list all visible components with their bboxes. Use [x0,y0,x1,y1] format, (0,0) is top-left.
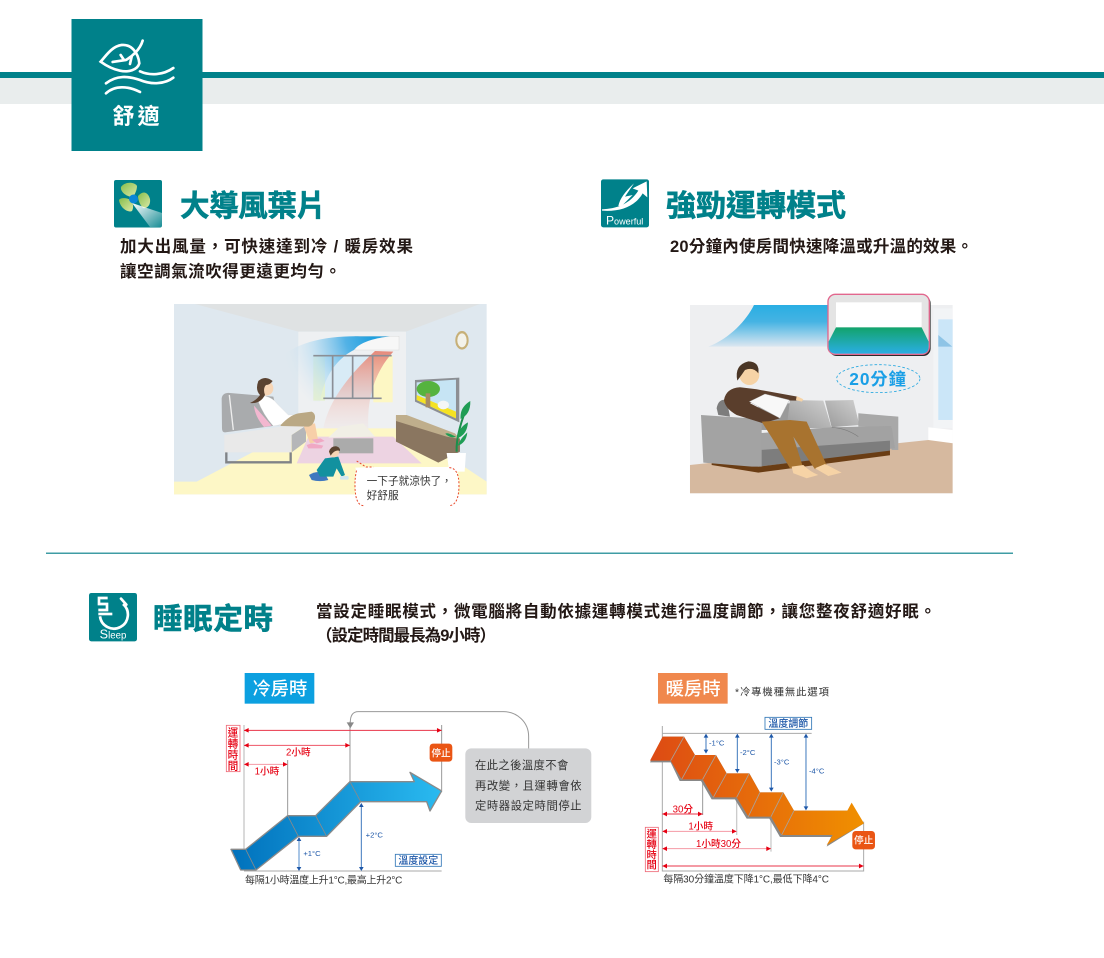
header band [0,72,1104,104]
AC close-up [828,294,931,356]
rug [297,437,422,463]
warm airflow [323,351,393,428]
icon: powerful: Powerful [606,213,643,227]
operating time label [645,827,658,872]
caption: 每隔30分鐘溫度下降1°C,最低下降4°C [663,872,829,885]
temperature drop markers: -2°C [740,748,756,757]
time arrows: 1小時 [688,821,713,832]
time arrows [662,804,864,868]
chart: cooling [226,673,591,886]
temperature drop markers: -4°C [809,767,825,776]
panel: powerful mode [601,179,973,493]
callout: 一下子就涼快了， [367,474,452,487]
time arrows: 1小時 [255,766,280,777]
axes [662,726,864,871]
illustration: man on sofa [690,294,953,493]
panel: sleep timer [89,593,936,886]
operating time label: 時 [228,749,239,761]
note box: 再改變，且運轉會依 [475,779,582,793]
operating time label: 運 [228,727,239,740]
caption: 每隔1小時溫度上升1°C,最高上升2°C [245,873,402,886]
description: 20分鐘內使房間快速降溫或升溫的效果。 [670,236,973,256]
callout [355,461,459,506]
icon: leaf on breeze [101,41,173,93]
description [120,236,414,281]
icon: powerful [601,179,649,227]
temperature adjust tag: 溫度調節 [768,717,808,730]
sofa [701,400,898,473]
20 minutes label: 20分鐘 [849,369,906,389]
temperature drop markers: -3°C [774,758,790,767]
heading: 睡眠定時 [153,603,273,636]
heading: 大導風葉片 [180,190,326,223]
child [309,446,349,481]
television [415,378,459,422]
temperature drop markers [704,734,825,810]
temperature drop markers: -1°C [709,739,725,748]
section divider [46,552,1013,554]
axes [244,722,442,871]
heating title: 暖房時 [666,678,721,699]
badge label: 舒適 [112,104,163,129]
sofa [222,393,306,462]
chart: heating [645,673,875,885]
operating time label: 轉 [228,737,239,750]
illustration: living room [174,304,487,506]
icon: sleep [89,593,137,641]
coffee table [328,423,375,453]
note box: 在此之後溫度不會 [475,758,568,772]
temperature arrow [231,772,442,870]
panel: large louver [114,180,487,506]
temperature rise markers: +1°C [303,849,321,858]
heading: 強勁運轉模式 [666,190,846,223]
return arrow [347,712,529,750]
cool airflow [275,336,390,402]
description: 當設定睡眠模式，微電腦將自動依據運轉模式進行溫度調節，讓您整夜舒適好眠。 [316,601,936,621]
clock [455,331,469,350]
woman [250,378,325,448]
stop tag: 停止 [431,747,451,759]
time arrows [244,728,442,777]
callout: 好舒服 [367,489,399,502]
temperature arrow [650,737,864,847]
icon: sleep: Sleep [100,627,126,641]
cooling title [245,673,314,704]
potted plant [445,401,470,472]
description: 加大出風量，可快速達到冷 / 暖房效果 [120,236,414,256]
operating time label: 時 [647,849,657,861]
time arrows: 30分 [673,804,693,815]
temperature rise markers [297,803,383,871]
cooling title: 冷房時 [252,678,307,699]
window [313,356,393,402]
man [724,361,842,478]
note box: 定時器設定時間停止 [475,799,582,813]
icon: fan [114,180,162,228]
TV cabinet [396,415,460,463]
operating time label: 間 [647,860,657,872]
description: （設定時間最長為9小時） [316,625,496,645]
stop tag [852,831,875,849]
temperature rise markers: +2°C [366,831,383,840]
window frame [313,356,392,398]
note: *冷專機種無此選項 [735,686,830,699]
description [316,601,936,645]
stop tag [430,744,452,762]
description: 讓空調氣流吹得更遠更均勻。 [120,261,341,281]
time arrows: 1小時30分 [696,839,741,850]
time arrows: 2小時 [286,748,311,759]
set temperature tag: 溫度設定 [398,854,438,867]
operating time label: 間 [228,760,238,772]
note box [465,748,591,823]
category badge: comfort [72,19,202,151]
20 minutes label [837,365,920,393]
heating title [658,673,728,704]
air conditioner [355,336,399,350]
operating time label [226,725,240,772]
stop tag: 停止 [854,835,874,847]
operating time label: 轉 [647,838,658,851]
operating time label: 運 [647,828,658,841]
